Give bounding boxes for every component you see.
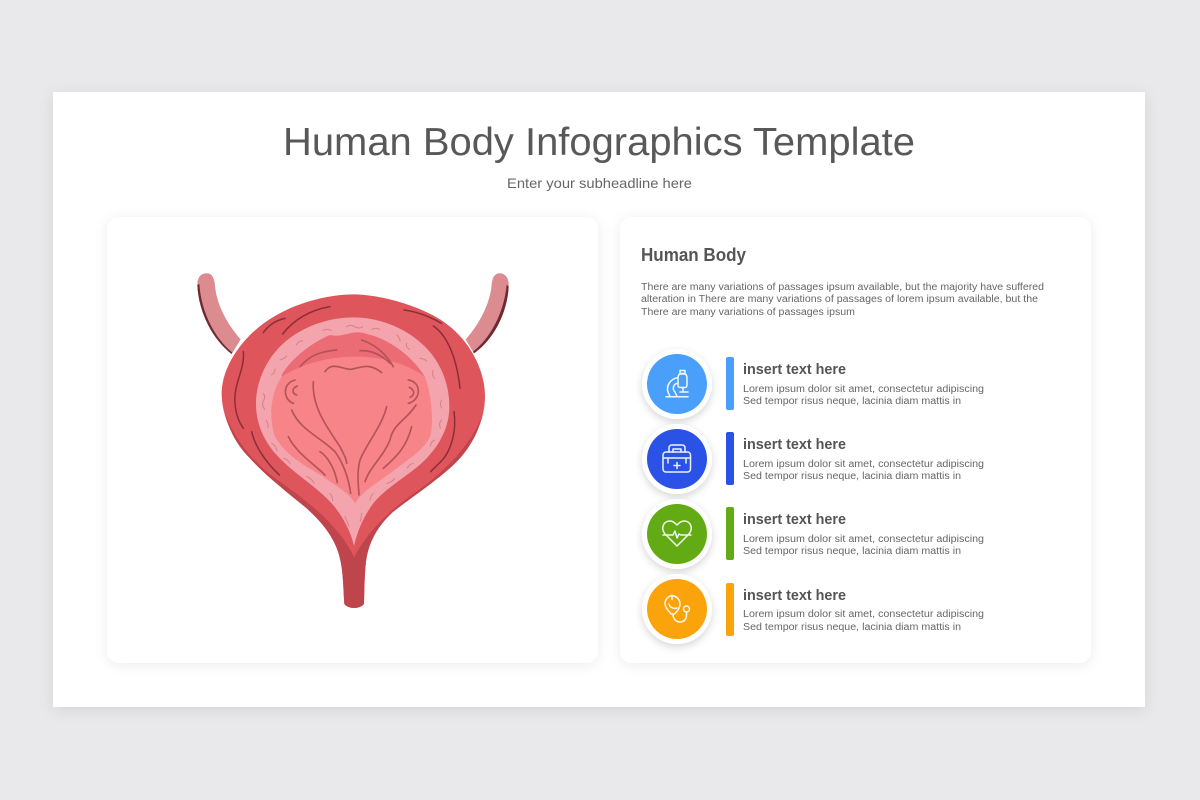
panel: bladder illustration [107, 217, 598, 663]
paragraph: alteration in There are many variations of passages of lorem ipsum available, but the [641, 294, 1038, 305]
icon: microscope [642, 349, 712, 419]
item text: Sed tempor risus neque, lacinia diam mattis in [743, 622, 961, 633]
wall creases [235, 307, 460, 475]
lining squiggles [263, 325, 442, 526]
icon: medical case [642, 424, 712, 494]
mucosa lines [285, 340, 418, 495]
inner lining [256, 317, 449, 546]
slide panel [53, 92, 1145, 707]
panel heading: Human Body [641, 245, 746, 265]
accent bar [726, 507, 734, 560]
item 2: medical case [642, 424, 984, 494]
item text [743, 512, 984, 557]
item 3: heart [642, 499, 984, 569]
accent bar [726, 432, 734, 485]
icon: heartbeat [642, 499, 712, 569]
item text: insert text here [743, 588, 846, 604]
inner chamber [271, 357, 432, 503]
icon: stethoscope [642, 574, 712, 644]
item text: Lorem ipsum dolor sit amet, consectetur adipiscing [743, 534, 984, 545]
paragraph: There are many variations of passages ipsum [641, 307, 855, 318]
paragraph [641, 282, 1044, 318]
item text: Lorem ipsum dolor sit amet, consectetur adipiscing [743, 384, 984, 395]
illustration: bladder cross-section [197, 273, 509, 608]
item 4: stethoscope [642, 574, 984, 644]
left ureter [197, 273, 241, 354]
title: Human Body Infographics Template [283, 121, 915, 164]
item text: Sed tempor risus neque, lacinia diam mattis in [743, 546, 961, 557]
accent bar [726, 583, 734, 636]
item text [743, 588, 984, 633]
accent bar [726, 357, 734, 410]
item text: insert text here [743, 437, 846, 453]
subheadline: Enter your subheadline here [507, 175, 692, 191]
bladder outer wall [222, 294, 485, 608]
item text: insert text here [743, 512, 846, 528]
item text: Lorem ipsum dolor sit amet, consectetur adipiscing [743, 609, 984, 620]
paragraph: There are many variations of passages ipsum available, but the majority have suffered [641, 282, 1044, 293]
panel: text content [620, 217, 1091, 663]
item text: Sed tempor risus neque, lacinia diam mattis in [743, 471, 961, 482]
item text: insert text here [743, 362, 846, 378]
lower shaded wall [225, 413, 482, 608]
item text: Lorem ipsum dolor sit amet, consectetur adipiscing [743, 459, 984, 470]
item text [743, 437, 984, 482]
item 1: microscope [642, 349, 984, 419]
item text: Sed tempor risus neque, lacinia diam mattis in [743, 396, 961, 407]
right ureter [466, 273, 509, 353]
inner folds band [282, 332, 425, 385]
item text [743, 362, 984, 407]
